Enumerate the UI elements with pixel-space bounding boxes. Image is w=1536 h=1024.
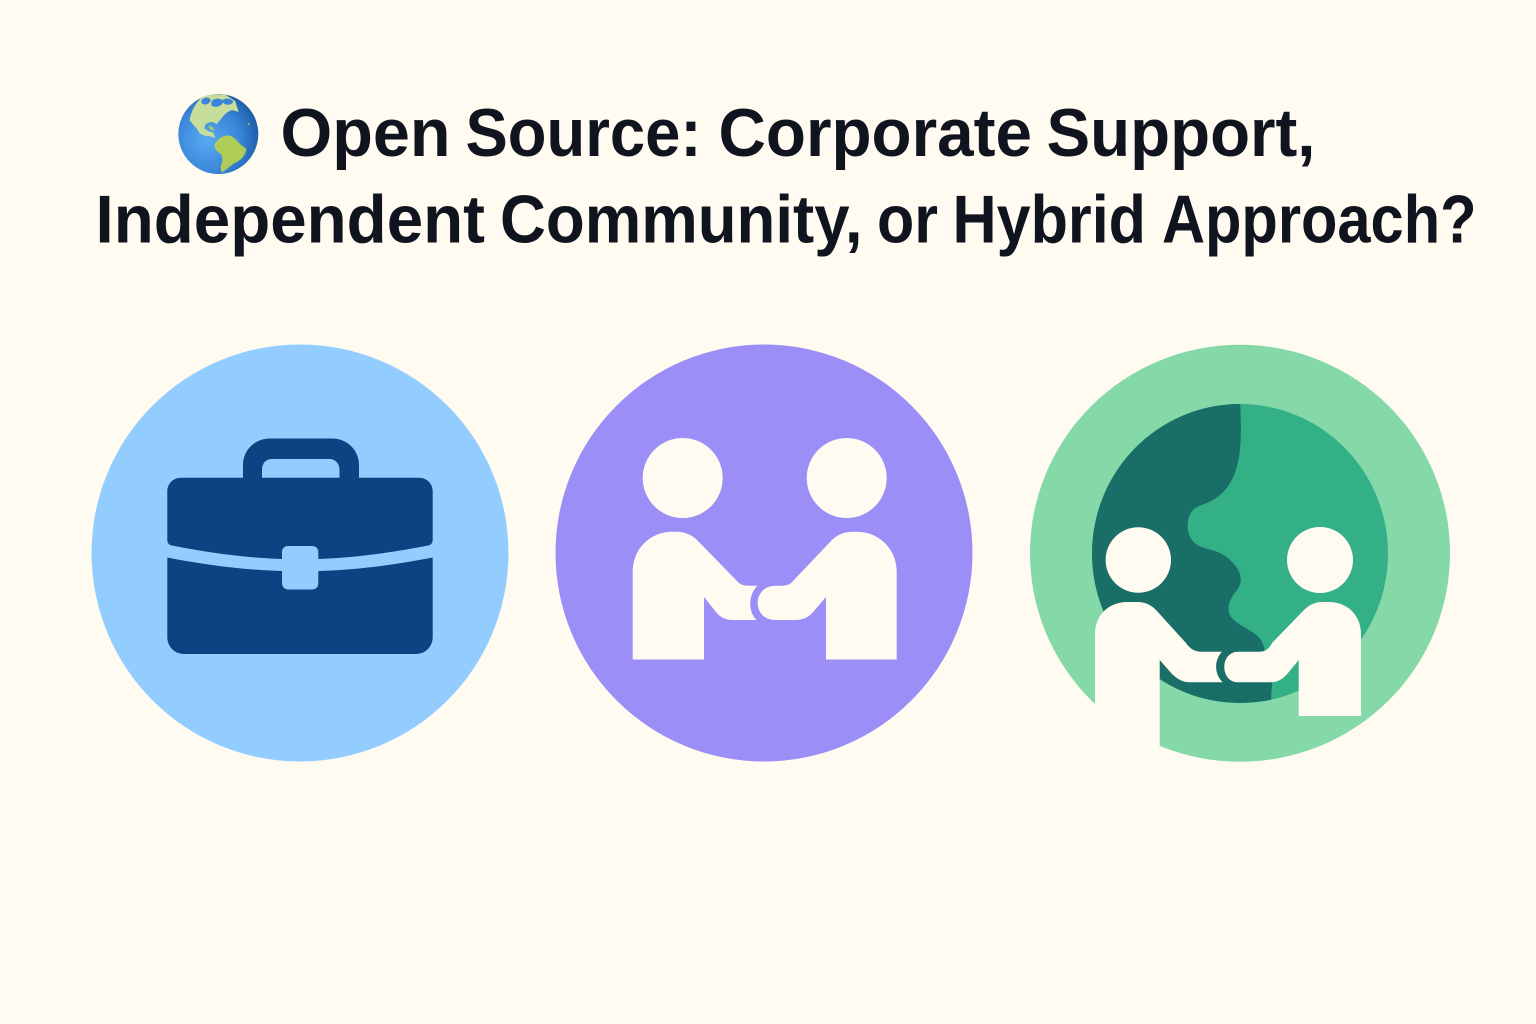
green circle	[1030, 345, 1450, 762]
purple circle	[556, 344, 972, 762]
title line 1: Open	[280, 95, 450, 171]
panel: hybrid approach	[1030, 345, 1450, 775]
blue circle	[92, 344, 508, 762]
title line 2: Community,	[500, 181, 862, 257]
title line 2: Independent	[96, 181, 485, 257]
panel: independent community	[556, 344, 972, 762]
title	[96, 94, 1476, 257]
title line 1: Support,	[1046, 95, 1316, 171]
title line 2	[96, 181, 1476, 257]
icon: earth globe emoji	[178, 94, 258, 174]
icon: globe	[1080, 400, 1390, 710]
title line 2: or	[877, 181, 938, 257]
title line 1: Source:	[466, 95, 702, 171]
icon: two people shaking hands over globe	[1095, 527, 1361, 775]
title line 1	[280, 95, 1316, 171]
title line 2: Approach?	[1162, 181, 1476, 257]
panel: corporate support	[92, 344, 508, 762]
title line 1: Corporate	[718, 95, 1032, 171]
title line 2: Hybrid	[952, 181, 1146, 257]
icon: two people shaking hands	[633, 438, 897, 660]
icon: briefcase	[167, 438, 433, 654]
